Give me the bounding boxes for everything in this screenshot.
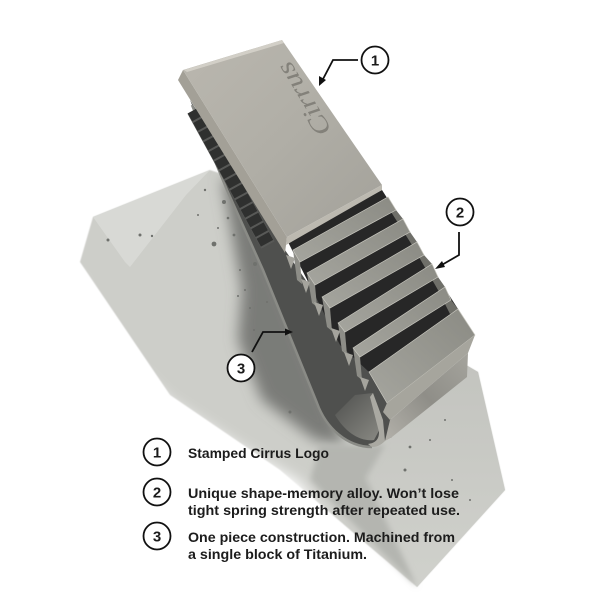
- slot grid on underside: [194, 110, 268, 245]
- legend item 1: [144, 438, 329, 466]
- callout 3: [228, 328, 293, 382]
- callout 2: 2: [456, 204, 464, 222]
- tooth 2: [307, 219, 410, 285]
- concrete speckles: [106, 189, 471, 511]
- concrete lower facet: [310, 445, 417, 587]
- plate highlight: [184, 40, 284, 72]
- tooth 1: [293, 197, 396, 262]
- concrete shadow beside band: [222, 178, 345, 445]
- band end rim: [368, 393, 385, 447]
- concrete upper left facet: [93, 170, 210, 267]
- titanium clip: [178, 40, 475, 447]
- lower curved face: [383, 335, 475, 420]
- legend item 2: tight spring strength after repeated use.: [188, 503, 460, 518]
- legend item 1: Stamped Cirrus Logo: [188, 446, 329, 461]
- legend item 3: [144, 522, 455, 562]
- tooth root pieces: [293, 250, 362, 380]
- legend item 1: 1: [153, 444, 161, 462]
- tooth 4: [338, 264, 438, 332]
- spring band: [190, 100, 392, 447]
- dark slots behind teeth: [287, 190, 458, 372]
- callout 3: 3: [237, 360, 245, 378]
- plate front edge: [286, 185, 382, 245]
- teeth: [293, 197, 475, 403]
- legend item 3: 3: [153, 528, 161, 546]
- legend item 2: Unique shape-memory alloy. Won’t lose: [188, 486, 460, 501]
- callout 2: [435, 198, 474, 269]
- band inner curve: [335, 393, 382, 440]
- band outer edge: [192, 105, 372, 447]
- slot grid base: [194, 110, 268, 245]
- legend item 2: [144, 478, 460, 518]
- stamped logo: Cirrus: [272, 57, 337, 141]
- legend item 3: One piece construction. Machined from: [188, 530, 455, 545]
- legend item 2: 2: [153, 484, 161, 502]
- plate top: [183, 40, 382, 237]
- wide end tooth: [369, 309, 475, 403]
- callout 1: [319, 46, 388, 86]
- tooth end faces: [386, 197, 458, 314]
- plate side: [178, 70, 287, 253]
- callout 1: 1: [371, 52, 379, 70]
- legend item 3: a single block of Titanium.: [188, 547, 367, 562]
- concrete right face: [366, 365, 505, 587]
- white glare over lower left: [30, 275, 385, 600]
- concrete stand: [30, 170, 505, 600]
- tooth root notches: [286, 255, 369, 391]
- lower curved underside: [385, 353, 468, 441]
- tooth 5: [353, 287, 451, 357]
- tooth 3: [322, 242, 424, 308]
